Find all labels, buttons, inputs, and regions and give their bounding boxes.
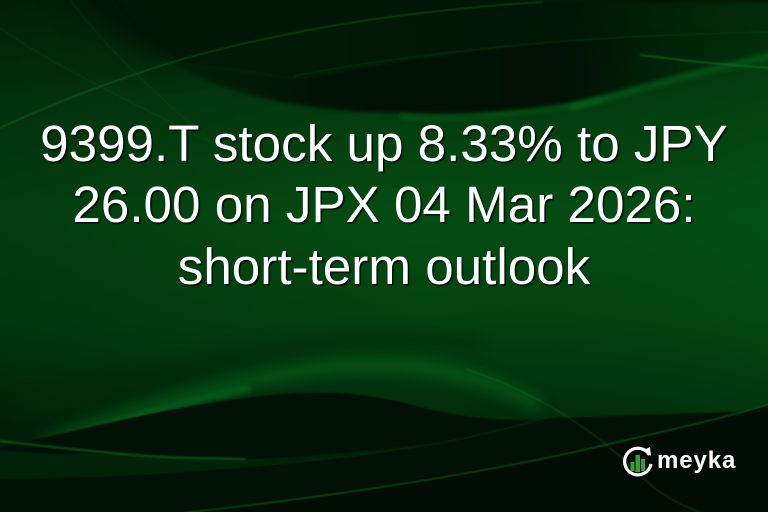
- bottom dark hill: [0, 393, 768, 512]
- title: 9399.T stock up 8.33% to JPY: [40, 115, 728, 172]
- icon: circular arrow with green bars: [623, 446, 652, 476]
- title: 26.00 on JPX 04 Mar 2026:: [72, 176, 696, 233]
- wordmark: meyka: [657, 447, 736, 474]
- top light streaks: [0, 0, 768, 145]
- title: short-term outlook: [178, 238, 590, 295]
- bottom light streaks: [0, 369, 768, 512]
- logo: meyka: [623, 446, 736, 476]
- bottom glow above hill: [0, 338, 540, 470]
- bottom lower band: [0, 419, 539, 478]
- top dark sweep: [60, 0, 545, 62]
- title: [40, 115, 728, 295]
